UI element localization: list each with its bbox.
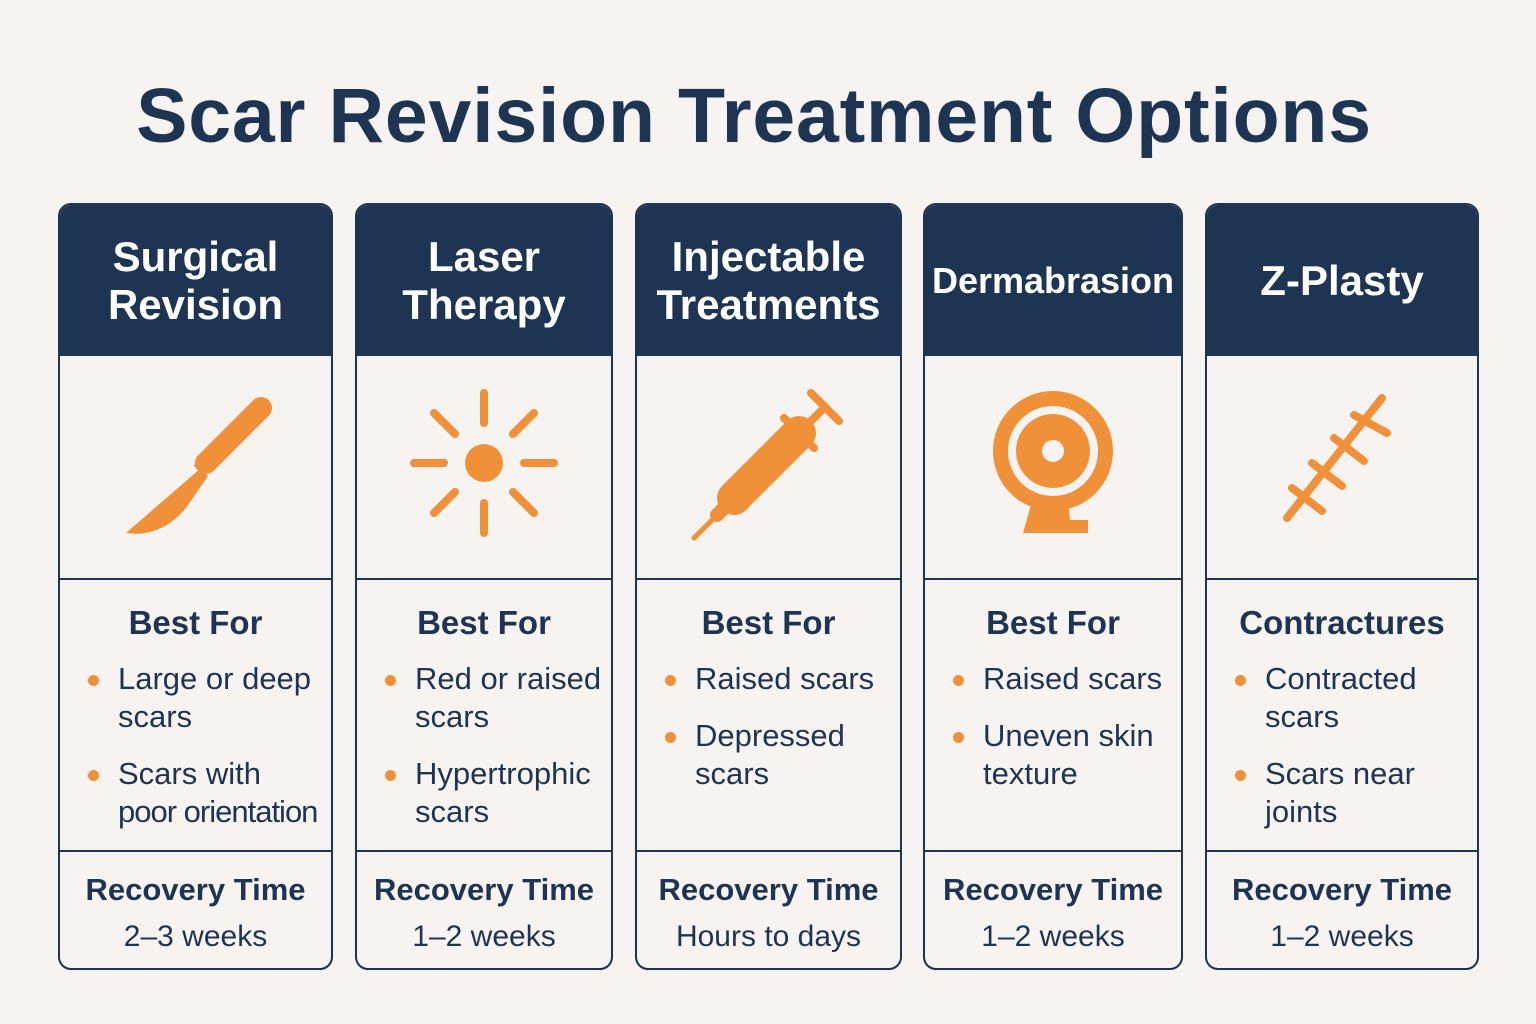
icon: sun burst — [357, 356, 611, 580]
panel: injectable treatments — [635, 203, 902, 970]
best for — [925, 578, 1181, 852]
recovery time: Hours to days — [676, 920, 861, 953]
recovery time — [86, 872, 306, 953]
header: Surgical — [113, 232, 278, 280]
header: Revision — [108, 280, 283, 328]
icon: stitched scar — [1207, 356, 1477, 580]
panel: surgical revision — [58, 203, 333, 970]
recovery time: 2–3 weeks — [124, 920, 267, 953]
best for — [637, 578, 900, 852]
icon: syringe — [637, 356, 900, 580]
recovery time: Recovery Time — [943, 872, 1163, 907]
panel: laser therapy — [355, 203, 613, 970]
recovery time — [658, 872, 878, 953]
header — [925, 205, 1181, 356]
recovery time — [374, 872, 594, 953]
recovery time: 1–2 weeks — [981, 920, 1125, 953]
recovery time: Recovery Time — [86, 872, 306, 907]
header: Laser — [428, 232, 540, 280]
panel: z-plasty — [1205, 203, 1479, 970]
best for — [357, 578, 611, 852]
header — [357, 205, 611, 356]
recovery time: Recovery Time — [374, 872, 594, 907]
recovery time — [1232, 872, 1452, 953]
icon: dermabrasion wheel — [925, 356, 1181, 580]
recovery time: 1–2 weeks — [1270, 920, 1414, 953]
header: Treatments — [656, 280, 881, 328]
header: Therapy — [402, 280, 566, 328]
recovery time: 1–2 weeks — [412, 920, 556, 953]
best for: Best For — [129, 604, 262, 641]
best for — [1207, 578, 1477, 852]
best for: Best For — [702, 604, 835, 641]
best for: Large or deep scars — [118, 661, 311, 734]
best for: Contractures — [1239, 604, 1445, 641]
best for: Raised scars — [695, 661, 874, 696]
header — [60, 205, 331, 356]
best for: Best For — [986, 604, 1120, 641]
best for: Scars near joints — [1265, 756, 1415, 829]
title: Scar Revision Treatment Options — [136, 73, 1372, 159]
best for: Contracted scars — [1265, 661, 1417, 734]
best for — [60, 578, 331, 852]
best for: Red or raised scars — [415, 661, 601, 734]
best for: Uneven skin texture — [983, 718, 1154, 791]
header — [1207, 205, 1477, 356]
header: Injectable — [672, 232, 865, 280]
header: Dermabrasion — [932, 260, 1174, 300]
best for: Scars with poor orientation — [118, 756, 317, 829]
best for: Best For — [417, 604, 551, 641]
header: Z-Plasty — [1260, 256, 1424, 304]
best for: Raised scars — [983, 661, 1162, 696]
panel: dermabrasion — [923, 203, 1183, 970]
recovery time: Recovery Time — [658, 872, 878, 907]
best for: Hypertrophic scars — [415, 756, 591, 829]
header — [637, 205, 900, 356]
recovery time — [943, 872, 1163, 953]
best for: Depressed scars — [695, 718, 845, 791]
icon: scalpel — [60, 356, 331, 580]
recovery time: Recovery Time — [1232, 872, 1452, 907]
